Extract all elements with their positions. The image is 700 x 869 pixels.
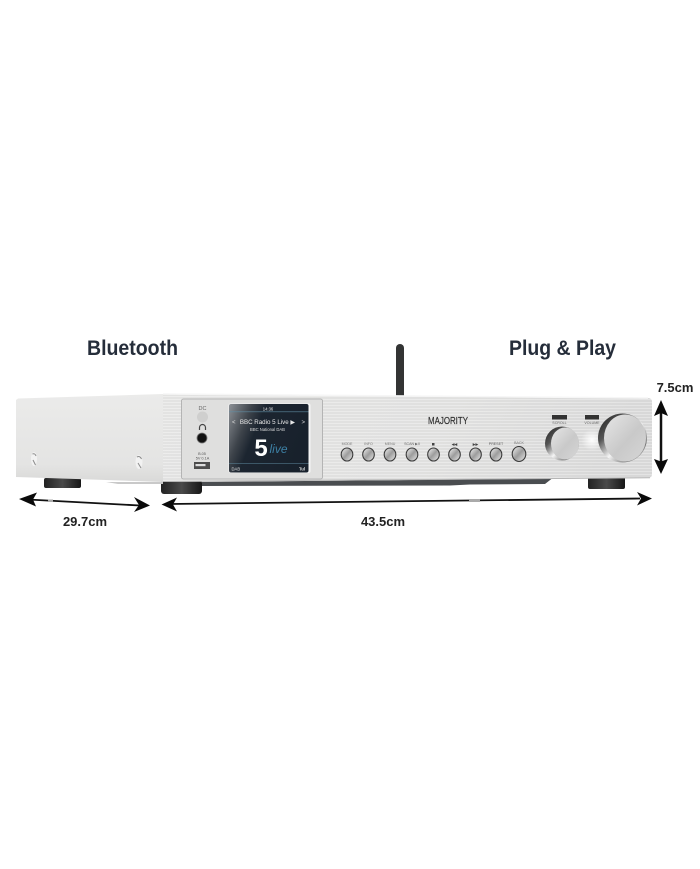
- knob: select scroll: SCROLL: [552, 421, 567, 425]
- button: SCAN: [404, 442, 420, 461]
- icon: USB port: [194, 462, 210, 469]
- button: previous: ◀◀: [451, 442, 458, 446]
- icon: headphones: [200, 424, 206, 430]
- button: stop: [428, 443, 439, 461]
- button: SCAN: SCAN ▶II: [404, 442, 420, 446]
- button: previous: [449, 442, 460, 461]
- label: USB rating: 5V 0.1A: [196, 456, 210, 460]
- multiplex name: BBC National DAB: [250, 427, 285, 432]
- button: next: ▶▶: [472, 442, 479, 446]
- station logo: 5: [254, 435, 268, 462]
- knob: volume: [581, 414, 647, 462]
- button: PRESET: PRESET: [489, 442, 504, 446]
- icon: antenna: [396, 344, 404, 396]
- knob: volume: VOLUME: [584, 421, 600, 425]
- heading: Plug & Play: Plug & Play: [509, 337, 616, 360]
- station name: BBC Radio 5 Live ▶: [240, 419, 295, 426]
- label: 29.7cm: 29.7cm: [63, 514, 107, 529]
- DAB label: DAB: [232, 466, 240, 472]
- device front panel: [163, 394, 652, 482]
- button: PRESET: [489, 442, 504, 461]
- display screen: [228, 404, 310, 473]
- label: 7.5cm: 7.5cm: [657, 380, 693, 395]
- button: MODE: [341, 442, 353, 461]
- right chevron: >: [302, 420, 306, 426]
- panel: input module: [182, 399, 322, 479]
- icon: power button: [197, 412, 208, 422]
- brand logo: MAJORITY: [428, 415, 468, 427]
- label: DC: DC: [199, 406, 206, 412]
- front panel buttons: [341, 441, 526, 462]
- label: 43.5cm: 43.5cm: [361, 514, 405, 529]
- button: BACK: [512, 441, 526, 462]
- side screw right: [136, 455, 142, 469]
- button: INFO: [363, 442, 374, 461]
- feet: [44, 476, 625, 494]
- button: INFO: INFO: [364, 442, 373, 446]
- icon: headphone jack: [197, 433, 207, 443]
- button: BACK: BACK: [514, 441, 524, 445]
- label: USB rating: B.05: [198, 452, 206, 456]
- button: MENU: [384, 442, 396, 461]
- button: next: [470, 442, 481, 461]
- side screw left: [31, 452, 37, 466]
- device side panel: [16, 394, 163, 482]
- arrow: height 7.5cm: [654, 400, 668, 474]
- arrow: width 43.5cm: [162, 492, 652, 512]
- heading: Bluetooth: Bluetooth: [87, 337, 178, 360]
- knob: select scroll: [545, 415, 579, 460]
- button: MENU: MENU: [385, 442, 396, 446]
- station logo: [254, 435, 288, 462]
- clock: 14:36: [263, 406, 274, 412]
- station logo: live: [269, 442, 288, 456]
- navigation chevrons: <: [232, 420, 236, 426]
- arrow: depth 29.7cm: [19, 492, 150, 512]
- signal icon: Tul: [299, 466, 305, 472]
- button: MODE: MODE: [342, 442, 353, 446]
